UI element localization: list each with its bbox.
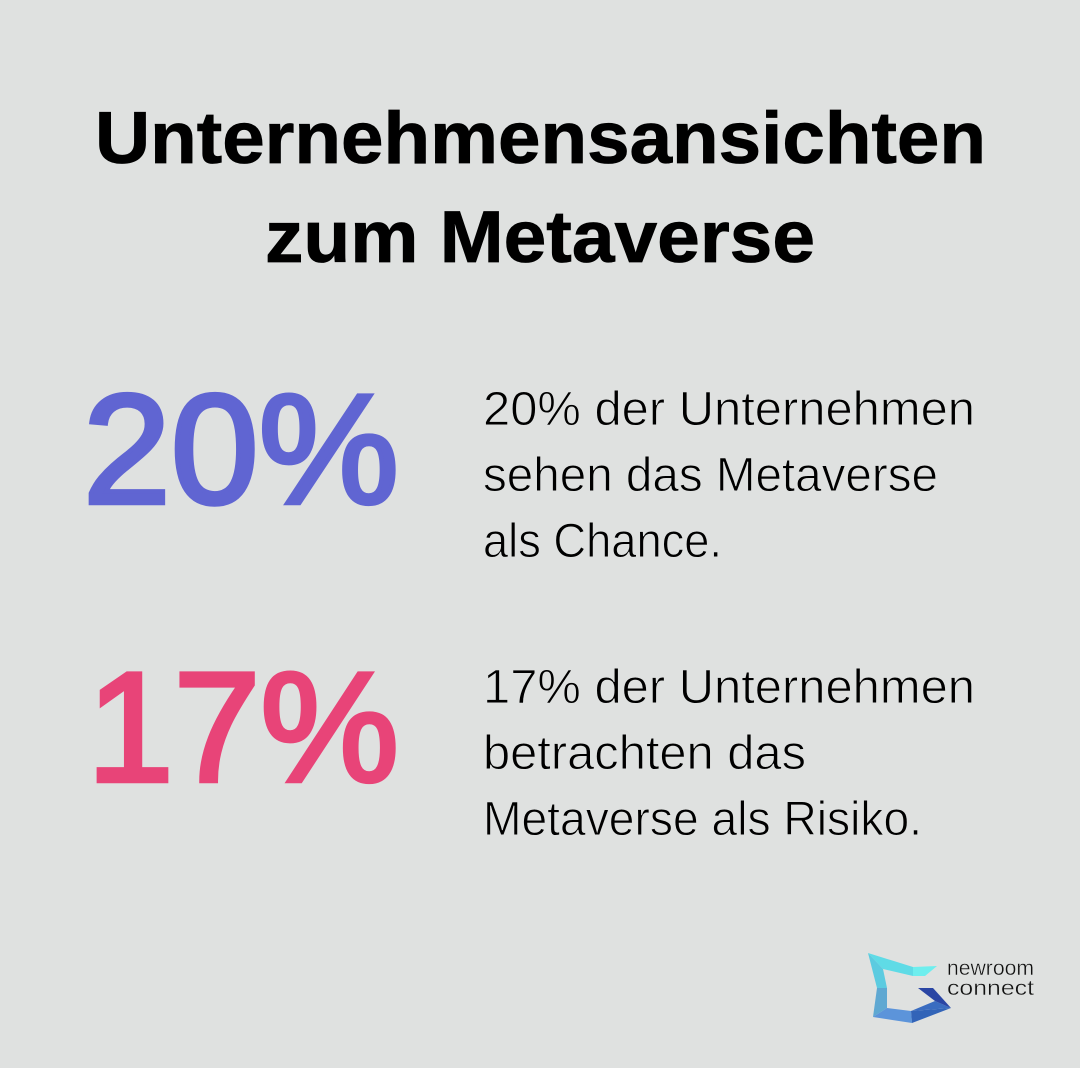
title: Unternehmensansichten bbox=[95, 98, 986, 179]
stat: 17%: 17% bbox=[87, 641, 399, 815]
description: 20%: sehen das Metaverse bbox=[483, 449, 938, 502]
description: 17%: Metaverse als Risiko. bbox=[483, 793, 922, 846]
description: 17%: 17% der Unternehmen bbox=[483, 661, 975, 714]
description: 17%: betrachten das bbox=[483, 727, 806, 780]
logo mark bbox=[868, 953, 951, 1023]
stat: 20%: 20% bbox=[83, 363, 399, 537]
logo text: connect bbox=[947, 977, 1034, 1000]
title bbox=[95, 98, 986, 278]
title: zum Metaverse bbox=[265, 197, 815, 278]
logo: newroom connect bbox=[868, 953, 1034, 1023]
description: 20%: 20% der Unternehmen bbox=[483, 383, 975, 436]
description: 20% bbox=[483, 383, 975, 568]
logo text: newroom bbox=[947, 957, 1034, 980]
description: 17% bbox=[483, 661, 975, 846]
logo text bbox=[947, 957, 1034, 1000]
description: 20%: als Chance. bbox=[483, 515, 722, 568]
